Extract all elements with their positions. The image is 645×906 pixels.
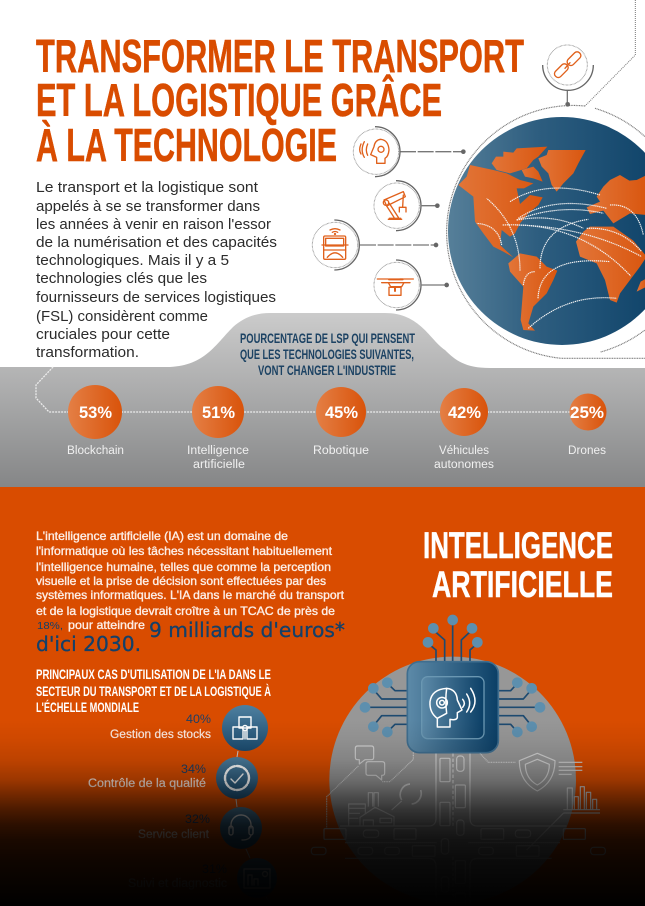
panel: white header background — [0, 0, 645, 370]
heading: artificial intelligence — [423, 525, 613, 605]
stat: artificial intelligence 51%: artificielle — [193, 459, 245, 471]
title — [36, 30, 524, 171]
globe illustration — [312, 0, 645, 358]
intro text block: de la numérisation et des capacités — [36, 234, 277, 251]
grey circle backdrop — [329, 657, 576, 903]
stat: robotics 45% — [313, 387, 369, 457]
AI paragraph: l'informatique où les tâches nécessitant habituellement — [36, 545, 333, 558]
use case: customer service: 32% — [185, 814, 210, 826]
heading: survey question: QUE LES TECHNOLOGIES SUIVANTES, — [240, 346, 414, 362]
continents — [458, 147, 645, 331]
trade route arcs — [477, 188, 643, 328]
AI paragraph — [36, 530, 345, 656]
title: ET LA LOGISTIQUE GRÂCE — [36, 74, 442, 126]
icon: blockchain link — [543, 45, 593, 90]
use case: quality control: 34% — [181, 764, 206, 776]
AI paragraph: et de la logistique devrait croître à un TCAC de près de — [36, 605, 335, 618]
intro text block: Le transport et la logistique sont — [36, 179, 259, 196]
icon: robot arm — [374, 181, 421, 231]
use case: quality control: Contrôle de la qualité — [88, 778, 206, 790]
bottom black fade — [0, 720, 645, 906]
stat: artificial intelligence 51%: 51% — [202, 403, 235, 422]
intro text block — [36, 179, 277, 361]
stat: artificial intelligence 51% — [187, 386, 249, 471]
stat: drones 25% — [568, 394, 606, 457]
city line art — [311, 746, 605, 906]
AI paragraph: pour atteindre — [68, 619, 145, 632]
stat: blockchain 53%: Blockchain — [67, 445, 124, 457]
heading: survey question — [240, 330, 415, 378]
intro text block: technologiques. Mais il y a 5 — [36, 252, 229, 269]
intro text block: (FSL) considèrent comme — [36, 308, 208, 325]
AI paragraph: d'ici 2030. — [36, 632, 141, 656]
stat: robotics 45%: Robotique — [313, 445, 369, 457]
heading: survey question: VONT CHANGER L'INDUSTRIE — [258, 362, 396, 378]
dotted timeline — [36, 367, 590, 412]
stat: robotics 45%: 45% — [325, 403, 358, 422]
subheading: main AI use cases: L'ÉCHELLE MONDIALE — [36, 699, 139, 715]
use case: tracking and diagnostics: Suivi et diagnostic — [128, 878, 227, 890]
AI paragraph: L'intelligence artificielle (IA) est un domaine de — [36, 530, 288, 543]
subheading: main AI use cases: PRINCIPAUX CAS D'UTILISATION DE L'IA DANS LE — [36, 666, 271, 682]
stat: blockchain 53% — [67, 385, 124, 457]
use case: tracking and diagnostics: 31% — [202, 864, 227, 876]
use case: stock management: Gestion des stocks — [110, 729, 211, 741]
speech bubbles — [355, 746, 374, 764]
heading: survey question: POURCENTAGE DE LSP QUI PENSENT — [240, 330, 415, 346]
chip traces — [367, 623, 538, 732]
stat: drones 25%: 25% — [570, 403, 604, 422]
use case: tracking and diagnostics — [128, 858, 277, 898]
buildings — [349, 793, 402, 826]
use case: stock management: 40% — [186, 714, 211, 726]
use case connector — [236, 751, 272, 906]
stat: artificial intelligence 51%: Intelligence — [187, 445, 249, 457]
use case: stock management — [110, 705, 268, 751]
stat: autonomous vehicles 42%: 42% — [448, 403, 481, 422]
stat: autonomous vehicles 42%: autonomes — [434, 459, 494, 471]
icon: AI head on chip — [430, 688, 475, 727]
AI paragraph: 18%, — [37, 621, 63, 632]
connector lines — [360, 0, 645, 358]
title: À LA TECHNOLOGIE — [36, 119, 337, 171]
AI paragraph: systèmes informatiques. L'IA dans le marché du transport — [36, 589, 345, 602]
use case: customer service — [138, 807, 262, 849]
stat: autonomous vehicles 42%: Véhicules — [439, 445, 489, 457]
intro text block: appelés à se se transformer dans — [36, 198, 260, 215]
AI paragraph: l'intelligence humaine, telles que comme la perception — [36, 561, 331, 574]
subheading: main AI use cases — [36, 666, 271, 715]
stat: drones 25%: Drones — [568, 445, 606, 457]
panel: grey survey band — [0, 313, 645, 487]
chip inner panel — [422, 677, 484, 739]
icon: artificial intelligence head — [353, 127, 400, 177]
intro text block: fournisseurs de services logistiques — [36, 289, 276, 306]
AI paragraph: visuelle et la prise de décision sont effectuées par des — [36, 575, 326, 588]
chip body — [407, 662, 498, 753]
AI paragraph: 9 milliards d'euros* — [149, 618, 345, 642]
use case: quality control — [88, 757, 258, 799]
stat: blockchain 53%: 53% — [79, 403, 112, 422]
icon: delivery drone — [374, 260, 421, 310]
bar chart — [527, 787, 600, 850]
shield — [519, 753, 555, 791]
second speech bubble — [366, 762, 385, 780]
intro text block: technologies clés que les — [36, 270, 207, 287]
intro text block: transformation. — [36, 344, 139, 361]
globe sphere — [448, 117, 645, 345]
intro text block: les années à venir en raison l'essor — [36, 216, 271, 233]
chip nodes — [360, 615, 545, 737]
intro text block: cruciales pour cette — [36, 326, 170, 343]
panel: orange AI section — [0, 487, 645, 906]
icon: autonomous truck — [312, 220, 359, 270]
stat: autonomous vehicles 42% — [434, 388, 494, 471]
AI city illustration — [311, 615, 605, 906]
subheading: main AI use cases: SECTEUR DU TRANSPORT ET DE LA LOGISTIQUE À — [36, 683, 271, 699]
use case: customer service: Service client — [138, 829, 210, 841]
